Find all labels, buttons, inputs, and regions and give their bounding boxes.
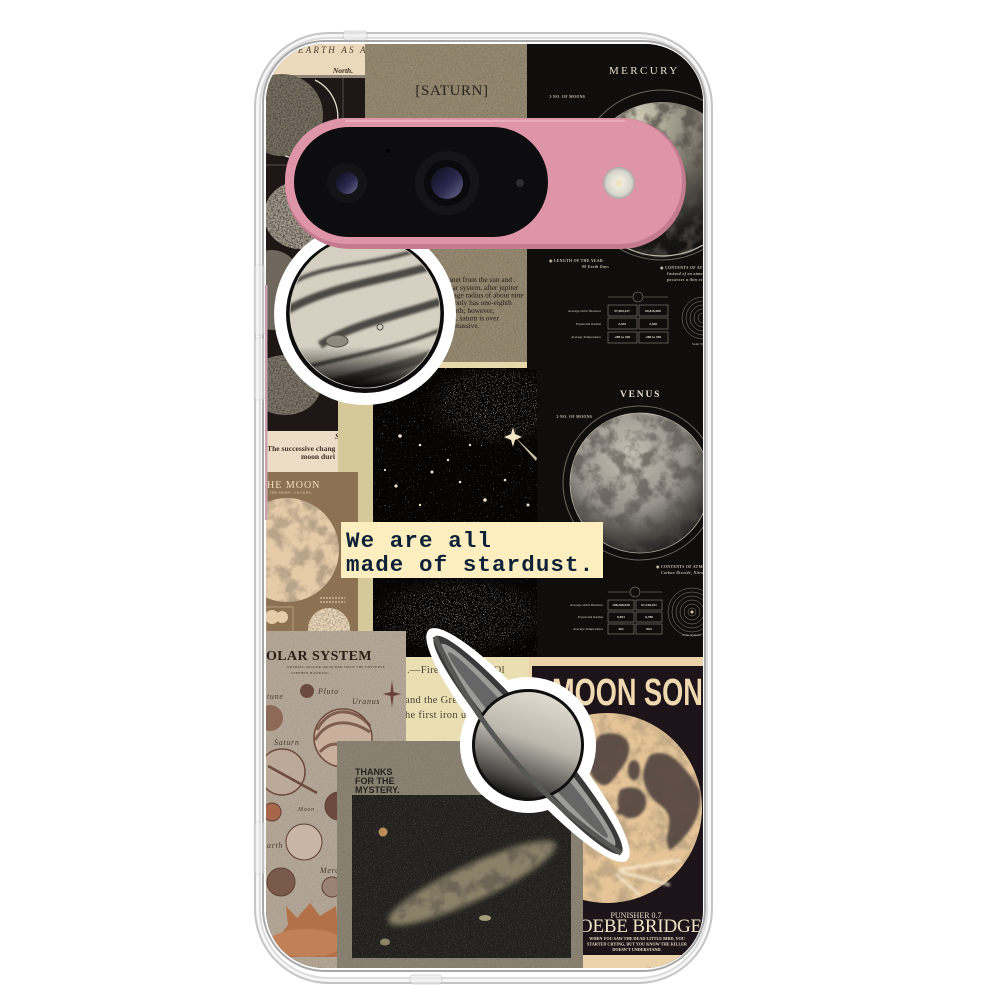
icon: uranus [314,709,372,767]
panel: fire text page: he first iron us [405,710,471,721]
icon: flash [603,167,635,199]
text: lyric [587,937,687,951]
panel: mercury and venus black chart: 88 Earth Days [582,265,609,269]
text block: saturn body: planet from the sun and . [443,275,516,284]
panel: the moon chart: HE MOON [267,480,320,491]
icon: small lens [327,163,367,203]
panel: solar system chart: Moon [297,807,315,813]
chart: venus data table: Average Orbit Distance [570,603,603,607]
heading: venus: VENUS [620,390,661,400]
chart: mercury data table: 69,816,900 [645,309,661,313]
chart: mercury data table: -280 to 430 [645,335,661,339]
text block: saturn body: solar system, after jupiter [444,283,519,292]
chart: venus data table: Average Temperature [573,627,603,631]
icon: venus solar system rings: Solar System [682,633,701,637]
panel: mercury and venus black chart: possesses a thin exosphere [666,278,718,282]
text: thanks for the mystery: FOR THE [355,776,394,786]
text: lyric: STARTED CRYING, BUT YOU KNOW THE KILLER [587,942,688,946]
panel: earth chart top strip [266,44,368,75]
panel: saturn page [365,44,527,368]
chart: mercury data table: Average Orbit Distance [568,309,601,313]
text: thanks for the mystery: MYSTERY. [355,785,400,795]
panel: the moon chart [266,472,358,631]
icon: mic dot [386,149,390,153]
icon: comet [504,427,537,461]
chart: venus data table: 462 [618,627,624,631]
panel: mercury and venus black chart: ☽ NO. OF MOONS [555,414,592,419]
printed collage [266,44,703,968]
icon: moon illustration [266,498,339,602]
panel: solar system chart: Saturn [274,738,300,747]
chart: venus data table [570,587,662,634]
callout: we are all made of stardust label: We are all [346,528,492,554]
panel: successive changes text: S [335,432,340,441]
panel: fire text page [405,657,536,742]
heading: saturn: [SATURN] [415,83,489,99]
icon: sensor [516,179,524,187]
panel: mercury and venus black chart: ☽ NO. OF MOONS [548,94,585,99]
phone case clear bumper [255,33,712,983]
case side buttons and notches [254,31,442,984]
panel: solar system chart: Pluto [317,687,339,696]
sticker: jupiter [274,223,456,405]
panel: successive changes text: moon duri [301,452,335,461]
panel: fire text page: and the Greeks [405,695,472,706]
panel: thanks for the mystery card [337,741,583,968]
panel: earth chart top strip: EARTH AS A [297,45,368,55]
panel: mercury and venus black chart: Carbon Dioxide, Nitrogen [661,571,710,575]
text block: saturn body: earth; however, [449,306,494,315]
panel: successive changes text: The successive chang [267,444,336,453]
panel: successive changes text [268,431,338,472]
icon: small planets [266,792,337,898]
icon: sun face [272,903,337,957]
panel: star field [373,367,537,657]
heading: mercury: MERCURY [609,65,680,77]
camera window [294,127,548,237]
panel: mercury and venus black chart: ◉ CONTENTS OF ATMOSPHERE [656,565,723,569]
panel: earth chart top strip: North. [332,66,353,75]
chart: mercury data table: Equatorial Radius [576,322,602,326]
panel: solar system chart: arth [267,841,283,850]
chart: mercury data table: -280 to 430 [614,335,630,339]
heading: solar system: OLAR SYSTEM [266,649,372,664]
panel: fire text page: .—Fire-worship of Ol [407,665,505,676]
text block: saturn body: c massive. [449,321,480,330]
icon: moon illustration [583,713,702,903]
text: thanks for the mystery: THANKS [355,767,392,777]
icon: mercury solar system rings: Solar System [692,342,711,346]
icon: saturn sketch [259,749,317,795]
chart: mercury data table: 2,440 [649,322,657,326]
chart: venus data table: 67,238,251 [641,603,657,607]
icon: main lens [415,151,479,215]
chart: venus data table: 864 [646,627,652,631]
chart: venus data table: 6,051 [617,615,625,619]
icon: mercury planet [598,90,703,260]
panel: cream strip [338,400,374,635]
text block: saturn body: ne, saturn is over [449,314,499,322]
chart: venus data table: 108,208,930 [612,603,630,607]
icon: venus planet [563,406,717,560]
sticker: saturn [374,583,682,907]
text block: saturn body: It only has one-eighth [448,298,512,307]
panel: mercury and venus black chart: ◉ CONTENTS OF ATMOSPHERE [660,266,727,270]
callout: we are all made of stardust label: made of stardust. [346,552,594,578]
chart: mercury data table: Average Temperature [571,335,601,339]
icon: neptune [266,705,283,731]
panel: solar system chart: STEPHEN HAWKING [291,671,329,675]
chart: mercury data table: 2,439 [618,322,626,326]
heading: moon song: MOON SONG [552,672,724,714]
text: phoebe bridgers: PHOEBE BRIDGERS [555,916,725,937]
text: punisher: PUNISHER 0.7 [610,911,662,920]
panel: solar system chart: Uranus [352,697,380,706]
text: lyric: DOESN'T UNDERSTAND. [612,947,662,952]
panel: mercury and venus black chart: ◉ LENGTH OF THE YEAR [549,259,603,263]
panel: solar system chart: Mercury [319,866,352,875]
icon: mercury solar system rings [682,296,703,346]
text: lyric: WHEN YOU SAW THE DEAD LITTLE BIRD, YOU [589,936,685,941]
panel: solar system chart: NOTHING BIGGER OR OLDER THAN THE UNIVERSE [287,665,385,669]
panel: mercury and venus black chart [527,44,703,657]
text block: saturn body: average radius of about nine [441,290,524,300]
text: thanks for the mystery [355,768,399,793]
icon: pluto [300,684,314,698]
panel: solar system chart [257,631,406,968]
chart: mercury data table [568,292,668,343]
camera bar [285,118,686,249]
panel: mercury and venus black chart: Instead of an atmosphere [666,272,715,276]
icon: star [383,680,401,708]
panel: moon song poster [529,657,703,968]
chart: mercury data table: 57,909,227 [614,309,630,313]
panel: the moon chart: · THE MOON · LA LUNA [267,490,312,494]
panel: galaxy illustration [352,795,571,958]
panel: solar system chart: tune [267,692,284,701]
chart: venus data table: Equatorial Radius [578,615,604,619]
panel: dark moon phases chart [266,74,365,415]
callout: we are all made of stardust label [341,522,603,578]
text block: saturn body [449,276,524,328]
icon: venus solar system rings [668,588,703,636]
chart: venus data table: 6,780 [645,615,653,619]
